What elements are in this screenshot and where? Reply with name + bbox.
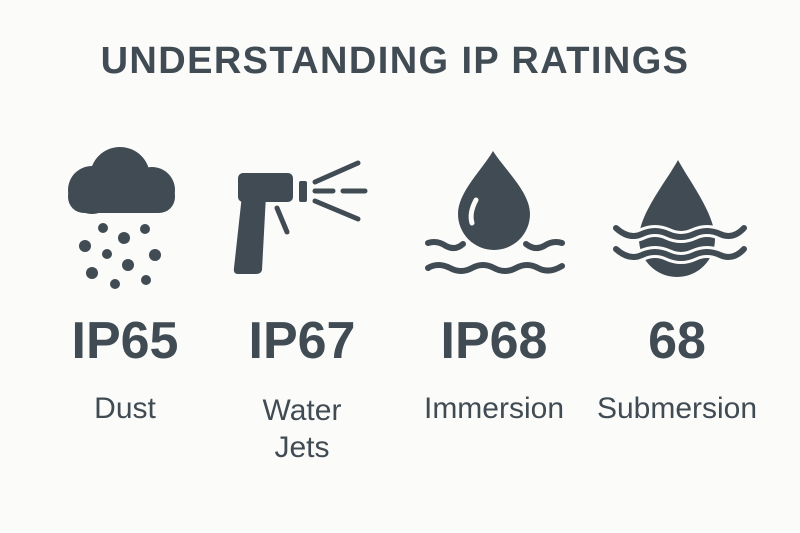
label: Water Jets: Water xyxy=(263,394,341,427)
icon: submerged drop xyxy=(616,160,744,277)
icon: drop with waves xyxy=(428,151,562,271)
rating: 68: 68 xyxy=(648,312,706,370)
rating: IP67: IP67 xyxy=(248,312,355,370)
icon: spray gun xyxy=(234,163,365,274)
label: Water Jets: Jets xyxy=(274,431,330,464)
label: Immersion: Immersion xyxy=(424,392,564,425)
label: Water Jets xyxy=(262,394,341,464)
rating: IP65: IP65 xyxy=(72,312,178,370)
label: Submersion: Submersion xyxy=(597,392,757,425)
rating: IP68: IP68 xyxy=(440,312,547,370)
icon: dust cloud xyxy=(68,147,175,289)
title: UNDERSTANDING IP RATINGS xyxy=(101,40,689,82)
label: Dust: Dust xyxy=(94,392,156,425)
